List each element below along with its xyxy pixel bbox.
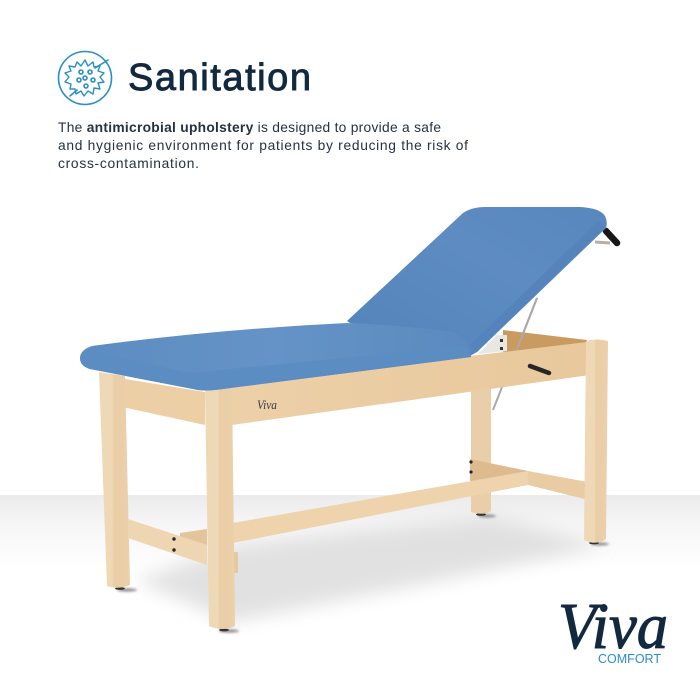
inner box of frame [503, 330, 587, 354]
body text: The antimicrobial upholstery is designed to provide a safe [58, 120, 441, 135]
body text: and hygienic environment for patients by reducing the risk of [58, 138, 468, 153]
black bracket [606, 231, 617, 243]
support rod [493, 298, 537, 410]
right stretcher bolts [584, 484, 588, 498]
back leg [471, 385, 491, 514]
treatment table [80, 207, 617, 629]
brand logo: Viva [558, 590, 668, 663]
white hinge bracket [478, 335, 507, 354]
title: Sanitation [128, 57, 311, 99]
left stretcher bolts [172, 537, 176, 552]
rod segment in front of box [517, 298, 537, 349]
small logo on rail: Viva [257, 397, 277, 412]
short side rail [113, 377, 205, 425]
crossbar under backrest [595, 242, 610, 243]
hinge holes [500, 339, 503, 350]
body text: cross-contamination. [58, 156, 199, 171]
centre stretcher [233, 471, 528, 543]
icon: crossed-out germ [58, 52, 112, 104]
front corner leg [205, 386, 235, 629]
backrest cushion [347, 207, 607, 356]
right stretcher [528, 471, 593, 501]
seat front edge [80, 346, 471, 390]
back leg bracket with bolts [469, 460, 473, 474]
stretcher end tenon [234, 552, 238, 573]
back cross stretcher [470, 459, 528, 481]
floor shadow [115, 513, 609, 633]
right front leg [584, 340, 608, 543]
seat cushion [80, 323, 471, 390]
floor background [0, 495, 700, 570]
rear-left leg [99, 372, 130, 588]
lower inner stretcher [180, 529, 207, 549]
crank handle [530, 366, 549, 373]
body text [58, 120, 468, 171]
brand sub-label: COMFORT [598, 652, 661, 666]
left stretcher [128, 519, 207, 565]
backrest side [470, 221, 606, 352]
long side rail [232, 342, 590, 425]
